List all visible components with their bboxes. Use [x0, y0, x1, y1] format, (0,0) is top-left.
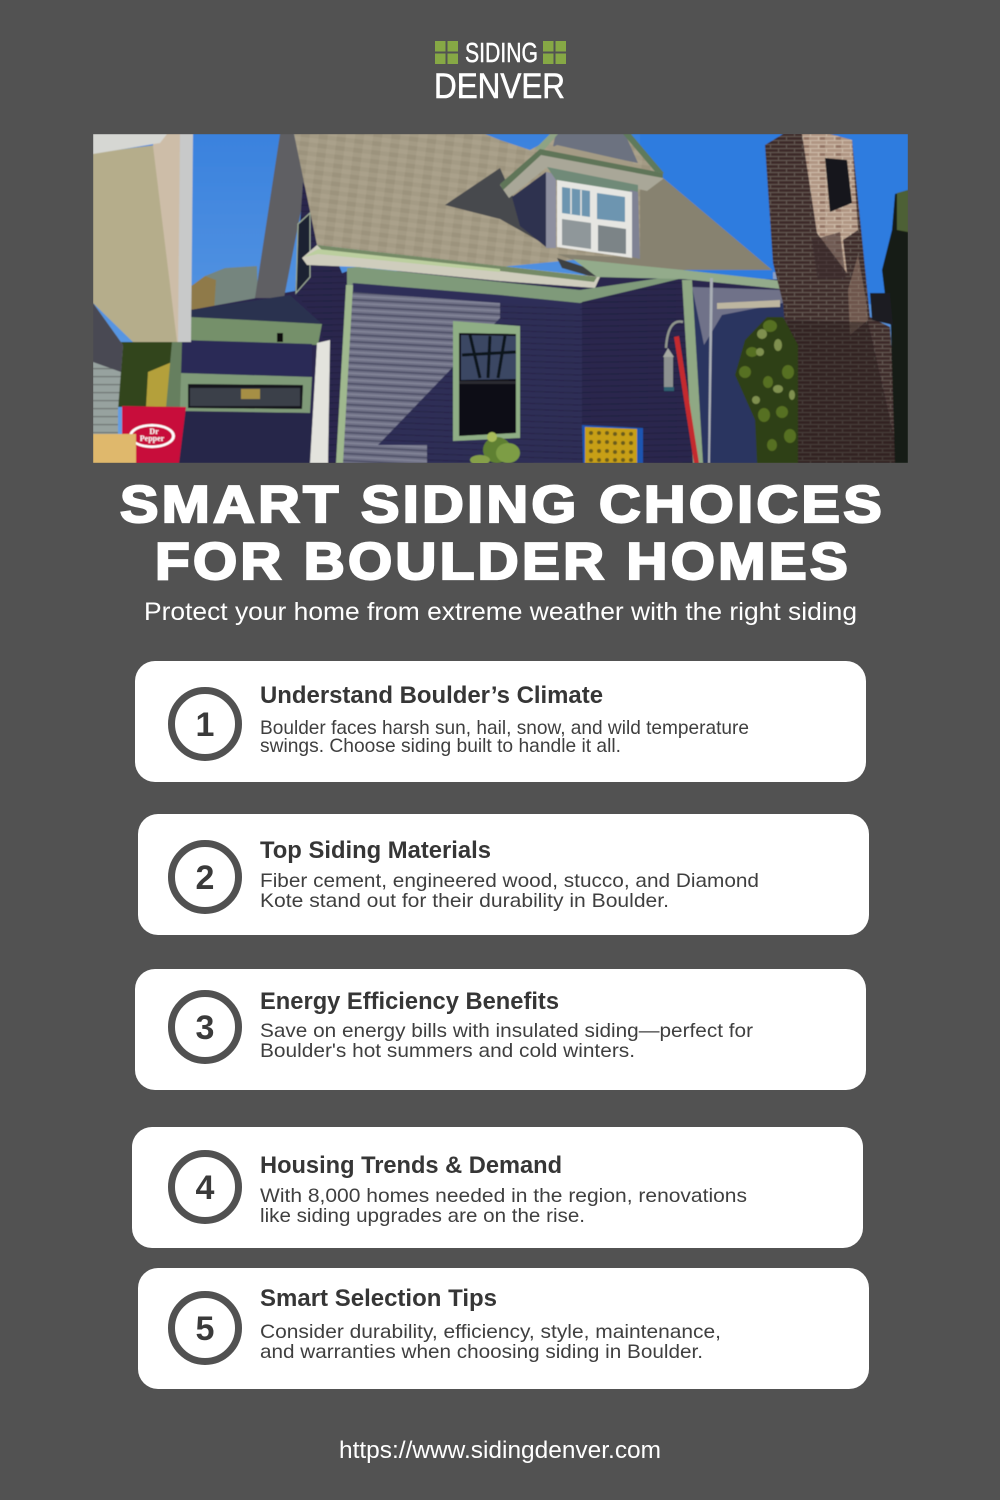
number badge 3: 3	[196, 1009, 214, 1047]
number badge 4	[172, 1154, 238, 1220]
panel: step 1	[135, 661, 866, 782]
right eave	[574, 258, 780, 290]
heading 3: Energy Efficiency Benefits	[260, 988, 559, 1015]
bird house	[825, 158, 852, 212]
lower addition panel	[178, 455, 181, 463]
logo word: SIDING: SIDING	[465, 37, 538, 68]
number badge 2: 2	[196, 859, 214, 897]
subtitle: Protect your home from extreme weather with the right siding	[144, 598, 857, 626]
left overhang fascia	[153, 134, 184, 342]
number badge 2	[172, 844, 238, 910]
body 1: swings. Choose siding built to handle it all.	[260, 735, 621, 757]
gable wall	[255, 134, 306, 298]
heading 5: Smart Selection Tips	[260, 1285, 497, 1312]
number badge 5	[172, 1294, 238, 1362]
dormer side wall	[512, 172, 546, 247]
wall shadow	[378, 296, 582, 463]
right roof slope darker	[557, 178, 772, 270]
lantern	[663, 322, 683, 391]
body 5: and warranties when choosing siding in Boulder.	[260, 1341, 703, 1363]
heading 1: Understand Boulder’s Climate	[260, 682, 603, 709]
climbing vine	[735, 317, 798, 463]
green corner board	[336, 285, 353, 463]
body 5: Consider durability, efficiency, style, maintenance,	[260, 1321, 721, 1343]
number badge 1	[172, 690, 238, 758]
door	[310, 340, 330, 463]
house right siding	[693, 297, 784, 463]
lower addition wall	[180, 340, 312, 378]
body 3	[260, 1020, 754, 1062]
lower addition fascia	[184, 317, 322, 345]
lower addition green window frame	[180, 373, 312, 413]
security light	[277, 333, 283, 342]
red pole	[674, 336, 699, 463]
chimney	[765, 134, 900, 463]
body 2: Fiber cement, engineered wood, stucco, and Diamond	[260, 870, 759, 892]
dormer window	[557, 180, 632, 258]
body 2: Kote stand out for their durability in Boulder.	[260, 890, 669, 912]
dormer roof	[554, 144, 632, 166]
main eave left	[302, 245, 600, 288]
body 4	[260, 1185, 747, 1227]
wall sunlit siding	[342, 283, 501, 463]
main roof	[294, 134, 772, 270]
background trees	[190, 266, 258, 310]
icon: left green window	[435, 41, 458, 64]
footer url: https://www.sidingdenver.com	[339, 1437, 661, 1464]
title: SMART SIDING CHOICES	[120, 476, 885, 534]
house backing	[184, 270, 780, 437]
panel: step 3	[135, 969, 866, 1090]
green trim band	[347, 267, 683, 303]
darker wall section	[582, 288, 692, 462]
body 3: Boulder's hot summers and cold winters.	[260, 1040, 635, 1062]
dormer roof eave	[500, 150, 663, 198]
heading 2: Top Siding Materials	[260, 837, 491, 864]
wall shadow top strip	[353, 282, 580, 310]
photo: house with purple siding	[93, 134, 908, 465]
gutter	[178, 134, 193, 342]
yellow game board	[582, 425, 643, 463]
logo word: DENVER: DENVER	[434, 67, 565, 106]
body 1	[260, 717, 749, 757]
heading 4: Housing Trends & Demand	[260, 1152, 562, 1179]
red sign	[122, 406, 186, 463]
body 4: like siding upgrades are on the rise.	[260, 1205, 585, 1227]
body 4: With 8,000 homes needed in the region, renovations	[260, 1185, 747, 1207]
title: FOR BOULDER HOMES	[155, 533, 851, 591]
foreground plant	[470, 432, 520, 465]
downspout cord	[708, 278, 713, 463]
dark shrub at right	[882, 190, 908, 463]
cardboard	[93, 434, 136, 463]
body 3: Save on energy bills with insulated siding—perfect for	[260, 1020, 754, 1042]
red sign: Dr	[149, 427, 159, 436]
upper side window	[296, 213, 310, 293]
roof shadow beside dormer	[445, 168, 538, 240]
icon: right green window	[543, 41, 566, 64]
panel: step 2	[138, 814, 869, 935]
lower addition roof	[190, 295, 322, 324]
red sign: Pepper	[140, 434, 165, 443]
sky	[93, 134, 892, 435]
dormer gable	[553, 134, 638, 163]
body 2	[260, 870, 759, 912]
number badge 4: 4	[196, 1169, 215, 1207]
body 5	[260, 1321, 721, 1363]
panel: step 5	[138, 1268, 869, 1389]
panel: step 4	[132, 1127, 863, 1248]
left house wall	[93, 346, 124, 435]
number badge 3	[172, 994, 238, 1060]
large window	[453, 321, 520, 441]
green corner right	[682, 280, 703, 463]
left overhang soffit	[93, 145, 182, 342]
upper side siding	[294, 182, 342, 292]
logo: Siding Denver	[434, 37, 566, 106]
transom window	[188, 384, 303, 409]
number badge 5: 5	[196, 1310, 214, 1348]
number badge 1: 1	[196, 706, 214, 744]
title	[120, 476, 885, 591]
tree under overhang	[118, 342, 172, 407]
body 1: Boulder faces harsh sun, hail, snow, and wild temperature	[260, 717, 749, 739]
porch post	[166, 342, 182, 408]
